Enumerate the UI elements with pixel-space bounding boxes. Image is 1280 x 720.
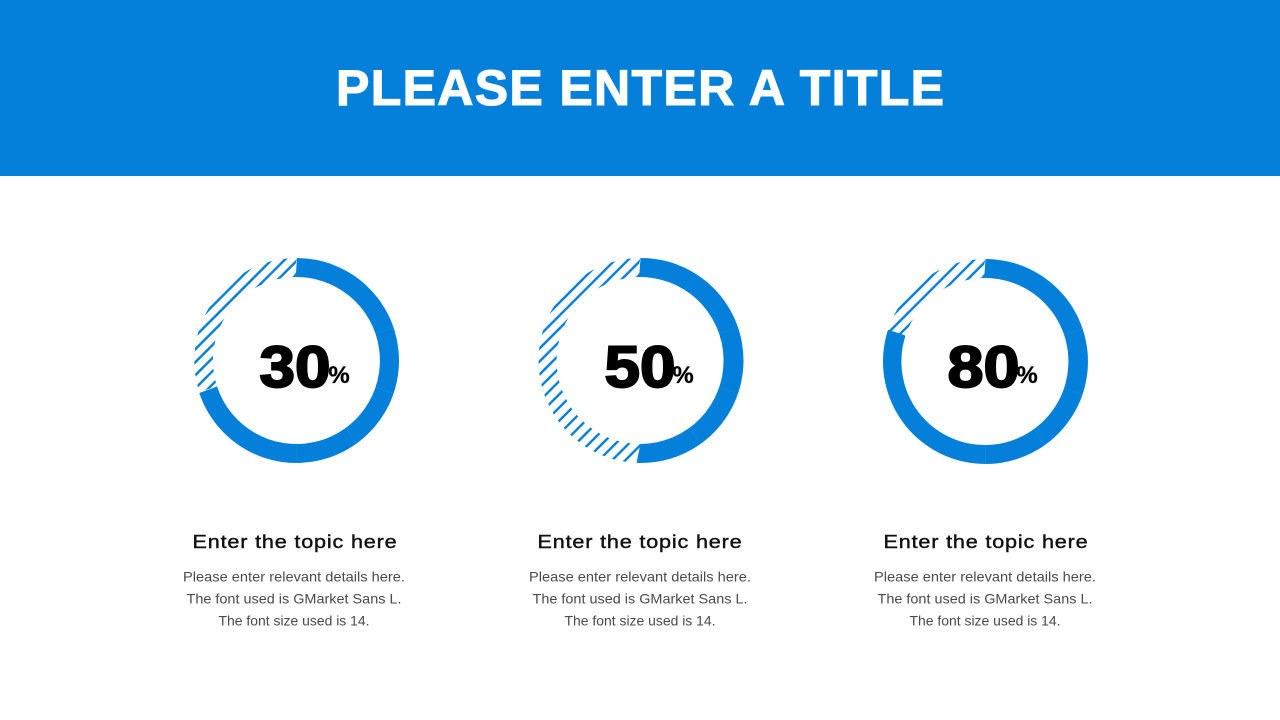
panel: 50 percent xyxy=(530,258,750,626)
description: Please enter relevant details here. xyxy=(183,568,405,584)
topic heading: Enter the topic here xyxy=(538,531,742,552)
description: The font used is GMarket Sans L. xyxy=(186,590,402,606)
panel: 80 percent xyxy=(875,259,1095,626)
topic heading: Enter the topic here xyxy=(192,531,398,552)
value: 80%: % xyxy=(1016,362,1038,389)
description xyxy=(529,568,751,628)
donut chart: 50% xyxy=(538,258,744,463)
value: 30%: 30 xyxy=(260,335,330,400)
description: The font used is GMarket Sans L. xyxy=(532,590,748,606)
topic heading: Enter the topic here xyxy=(884,531,1088,552)
value: 30%: % xyxy=(328,362,350,389)
description: Please enter relevant details here. xyxy=(529,568,751,584)
panel: 30 percent xyxy=(184,258,404,626)
value: 50%: 50 xyxy=(604,335,676,400)
description xyxy=(874,568,1096,628)
value: 50%: % xyxy=(672,362,694,389)
donut chart: 30% xyxy=(194,258,399,463)
value: 80%: 80 xyxy=(948,335,1020,400)
description xyxy=(183,568,405,628)
description: The font size used is 14. xyxy=(564,612,716,628)
donut chart: 80% xyxy=(882,259,1088,464)
title: PLEASE ENTER A TITLE xyxy=(336,60,944,116)
description: The font size used is 14. xyxy=(218,612,370,628)
description: Please enter relevant details here. xyxy=(874,568,1096,584)
description: The font used is GMarket Sans L. xyxy=(878,590,1092,606)
header band xyxy=(0,0,1280,176)
description: The font size used is 14. xyxy=(910,612,1060,628)
